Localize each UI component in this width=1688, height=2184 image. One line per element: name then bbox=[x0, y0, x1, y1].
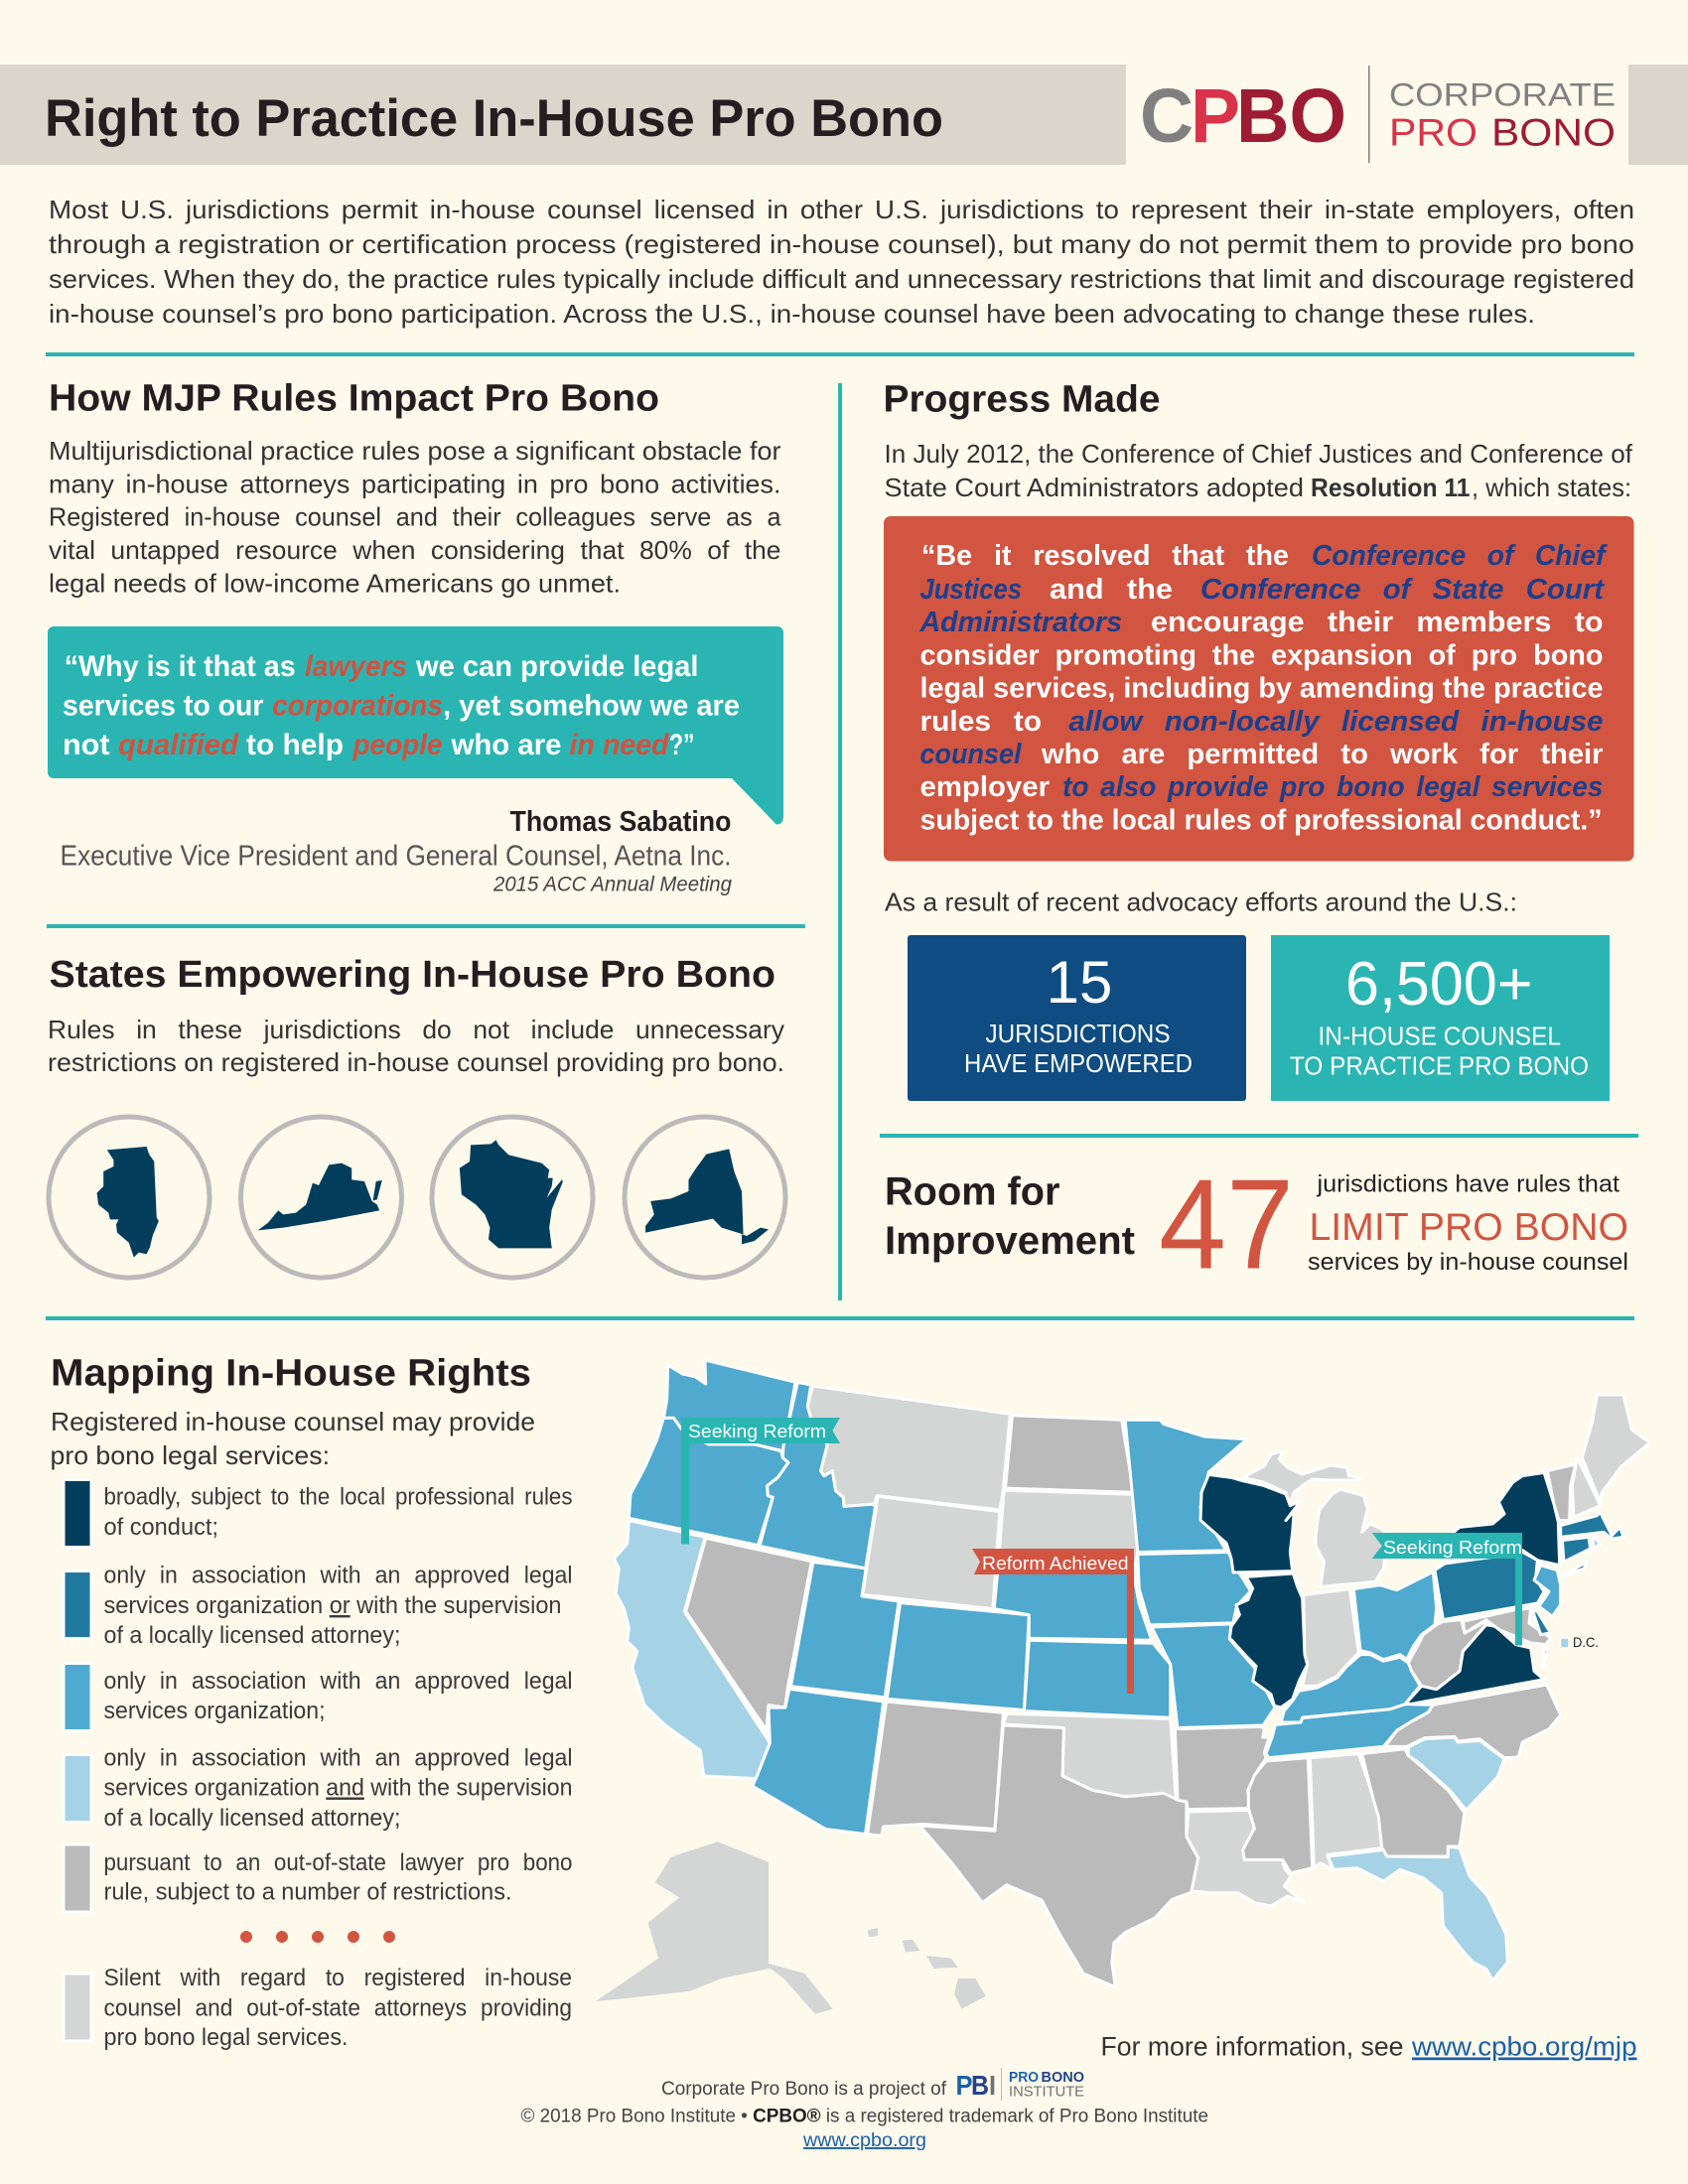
map region: great lakes and northeast states bbox=[1200, 1395, 1650, 1722]
stat: 47 jurisdictions limit pro bono: LIMIT PRO BONO bbox=[1309, 1206, 1628, 1249]
quote attribution: Thomas Sabatino bbox=[510, 806, 731, 838]
legend item: out-of-state rule bbox=[64, 1844, 572, 1912]
header band bbox=[0, 65, 1688, 165]
callout: Sabatino quote bubble: who are bbox=[451, 729, 562, 761]
state: Oklahoma bbox=[1003, 1713, 1176, 1801]
state: Washington bbox=[663, 1360, 795, 1451]
intro paragraph: services. When they do, the practice rules typically include difficult and unnecessary restrictions that limit and discourage registered bbox=[49, 264, 1634, 294]
panel: Resolution 11 quote: Justices bbox=[919, 574, 1022, 606]
stat card: 6,500+ in-house counsel: IN-HOUSE COUNSEL bbox=[1319, 1023, 1561, 1050]
intro paragraph: Most U.S. jurisdictions permit in-house counsel licensed in other U.S. jurisdictions to represent their in-state employers, often bbox=[49, 195, 1634, 224]
panel: Resolution 11 quote: to also provide pro bono legal services bbox=[1062, 771, 1603, 803]
logo: CPBO Corporate Pro Bono: P bbox=[1191, 73, 1240, 159]
intro paragraph: in-house counsel’s pro bono participation. Across the U.S., in-house counsel have been advocating to change these rules. bbox=[49, 299, 1535, 329]
state: Arkansas bbox=[1175, 1726, 1269, 1810]
legend item: silent: Silent with regard to registered in-house bbox=[103, 1965, 572, 1991]
state: Montana bbox=[807, 1386, 1010, 1510]
state: Mississippi bbox=[1243, 1758, 1313, 1873]
logo: CPBO Corporate Pro Bono bbox=[1140, 66, 1616, 163]
footer: www.cpbo.org bbox=[802, 2130, 926, 2151]
state: Iowa bbox=[1138, 1552, 1250, 1625]
panel: Resolution 11 quote: allow non-locally licensed in-house bbox=[1068, 706, 1603, 738]
state: Wyoming bbox=[863, 1496, 1000, 1609]
footer: Corporate Pro Bono is a project of bbox=[661, 2079, 947, 2100]
stat: 47 jurisdictions limit pro bono: jurisdictions have rules that bbox=[1316, 1171, 1619, 1197]
legend item: association: only in association with an approved legal bbox=[103, 1668, 572, 1695]
state: Rhode Island bbox=[1592, 1536, 1601, 1549]
callout: Sabatino quote bubble: to help bbox=[246, 729, 344, 761]
heading: Room for Improvement: Improvement bbox=[885, 1219, 1135, 1263]
callout: Sabatino quote bubble: services to our bbox=[63, 689, 264, 723]
callout: Sabatino quote bubble: “Why is it that as bbox=[65, 650, 296, 683]
stat: 47 jurisdictions limit pro bono bbox=[1159, 1154, 1628, 1297]
state: Colorado bbox=[887, 1602, 1029, 1710]
state: Ohio bbox=[1353, 1571, 1437, 1660]
logo: CPBO Corporate Pro Bono: BONO bbox=[1491, 111, 1616, 155]
state: Michigan upper bbox=[1243, 1451, 1360, 1504]
text: MJP rules paragraph: vital untapped resource when considering that 80% of the bbox=[49, 535, 780, 565]
stat: 47 jurisdictions limit pro bono: services by in-house counsel bbox=[1308, 1249, 1628, 1276]
legend item: silent: pro bono legal services. bbox=[103, 2024, 348, 2051]
legend item: association bbox=[64, 1664, 572, 1731]
stat: 47 jurisdictions limit pro bono: 47 bbox=[1159, 1154, 1294, 1297]
state: Alabama bbox=[1310, 1754, 1382, 1869]
logo: Pro Bono Institute bbox=[955, 2068, 1084, 2101]
map of the United States bbox=[596, 1360, 1650, 2014]
logo: Pro Bono Institute: B bbox=[971, 2070, 989, 2101]
state: Kansas bbox=[1024, 1640, 1171, 1717]
stat card: 15 jurisdictions: HAVE EMPOWERED bbox=[964, 1050, 1193, 1078]
state: Utah bbox=[790, 1563, 899, 1698]
state: Nebraska bbox=[994, 1564, 1152, 1640]
state: Arizona bbox=[753, 1689, 884, 1835]
state: Missouri bbox=[1152, 1624, 1275, 1728]
flag: Seeking Reform west: Seeking Reform bbox=[688, 1422, 826, 1441]
footer: © 2018 Pro Bono Institute • CPBO® is a registered trademark of Pro Bono Institute bbox=[520, 2107, 1208, 2126]
legend item: association and supervision bbox=[64, 1745, 572, 1832]
state: New York bbox=[1447, 1472, 1560, 1566]
legend item: broadly: of conduct; bbox=[103, 1514, 218, 1541]
text: legend intro: pro bono legal services: bbox=[50, 1440, 330, 1470]
text: legend intro bbox=[50, 1407, 535, 1470]
panel: Resolution 11 quote: “Be it resolved that the bbox=[921, 540, 1289, 572]
heading: How MJP Rules Impact Pro Bono: How MJP Rules Impact Pro Bono bbox=[49, 377, 659, 419]
legend item: silent bbox=[64, 1965, 572, 2051]
logo: Pro Bono Institute: I bbox=[989, 2070, 996, 2101]
stat card: 15 jurisdictions: 15 bbox=[1047, 949, 1112, 1016]
quote attribution: Executive Vice President and General Counsel, Aetna Inc. bbox=[60, 840, 731, 872]
logo: CPBO Corporate Pro Bono: BO bbox=[1236, 73, 1346, 159]
state: Oregon bbox=[629, 1418, 788, 1546]
text: advocacy results lead-in: As a result of recent advocacy efforts around the U.S.: bbox=[885, 887, 1517, 917]
state: South Dakota bbox=[998, 1490, 1138, 1573]
icon: Virginia bbox=[240, 1117, 401, 1278]
flag: Seeking Reform east: Seeking Reform bbox=[1383, 1538, 1522, 1558]
state: Massachusetts bbox=[1561, 1512, 1623, 1539]
legend divider dots bbox=[240, 1931, 395, 1943]
text: more information link: www.cpbo.org/mjp bbox=[1411, 2031, 1636, 2061]
map region: northwest states bbox=[614, 1360, 1010, 1779]
icon: Wisconsin bbox=[432, 1117, 593, 1278]
state: Pennsylvania bbox=[1435, 1552, 1544, 1620]
intro paragraph bbox=[49, 195, 1634, 329]
stat card: 15 jurisdictions: JURISDICTIONS bbox=[985, 1021, 1170, 1048]
state: New Mexico bbox=[868, 1702, 1003, 1836]
text: states paragraph: restrictions on registered in-house counsel providing pro bono. bbox=[48, 1047, 784, 1077]
state: Texas bbox=[919, 1725, 1198, 1987]
legend item: association and supervision: services organization and with the supervision bbox=[103, 1775, 572, 1801]
logo: Pro Bono Institute: PRO bbox=[1009, 2070, 1039, 2086]
panel: Resolution 11 quote: encourage their members to bbox=[1151, 607, 1603, 638]
state: Indiana bbox=[1303, 1589, 1358, 1686]
legend item: association or supervision bbox=[64, 1563, 572, 1649]
state: Kentucky bbox=[1281, 1655, 1420, 1722]
intro paragraph: through a registration or certification process (registered in-house counsel), but many do not permit them to provide pro bono bbox=[49, 229, 1634, 259]
logo: CPBO Corporate Pro Bono: CORPORATE bbox=[1389, 77, 1616, 113]
heading: States Empowering In-House Pro Bono: States Empowering In-House Pro Bono bbox=[50, 954, 775, 996]
panel: Resolution 11 quote: Conference of Chief bbox=[1312, 540, 1609, 572]
text: MJP rules paragraph bbox=[49, 436, 781, 598]
footer bbox=[520, 2068, 1208, 2151]
state: South Carolina bbox=[1408, 1737, 1504, 1810]
state: Connecticut bbox=[1562, 1537, 1591, 1562]
state: New Jersey bbox=[1534, 1566, 1561, 1616]
text: MJP rules paragraph: legal needs of low-income Americans go unmet. bbox=[49, 568, 621, 598]
title: Right to Practice In-House Pro Bono bbox=[45, 89, 943, 148]
panel: Resolution 11 quote: rules to bbox=[919, 706, 1042, 738]
logo: CPBO Corporate Pro Bono: C bbox=[1140, 73, 1194, 159]
heading: Room for Improvement bbox=[885, 1169, 1135, 1263]
callout: Sabatino quote bubble: lawyers bbox=[305, 650, 407, 683]
state: Delaware bbox=[1532, 1610, 1551, 1635]
icon: New York bbox=[625, 1117, 785, 1278]
callout: Sabatino quote bubble bbox=[48, 626, 783, 824]
text: more information link: For more information, see bbox=[1100, 2031, 1404, 2061]
heading: Mapping In-House Rights: Mapping In-House Rights bbox=[51, 1352, 531, 1394]
flag: Reform Achieved bbox=[972, 1549, 1134, 1694]
state: Maine bbox=[1582, 1395, 1650, 1502]
state: Alaska bbox=[596, 1842, 833, 2014]
text: MJP rules paragraph: Multijurisdictional practice rules pose a significant obstacle for bbox=[49, 436, 781, 466]
panel: Resolution 11 quote: legal services, including by amending the practice bbox=[919, 673, 1603, 705]
state: Long Island bbox=[1561, 1562, 1587, 1576]
map region: southeast states bbox=[1175, 1685, 1561, 1980]
map label: D.C.: D.C. bbox=[1573, 1634, 1599, 1650]
text: states paragraph: Rules in these jurisdictions do not include unnecessary bbox=[48, 1015, 784, 1044]
state icons row bbox=[49, 1117, 785, 1278]
panel: Resolution 11 quote: Conference of State Court bbox=[1200, 574, 1605, 606]
callout: Sabatino quote bubble: we can provide legal bbox=[415, 650, 699, 683]
text: states paragraph bbox=[48, 1015, 784, 1077]
stat card: 6,500+ in-house counsel: 6,500+ bbox=[1345, 950, 1533, 1019]
quote attribution bbox=[60, 806, 732, 895]
state: New Hampshire bbox=[1572, 1457, 1601, 1517]
panel: Resolution 11 quote bbox=[884, 516, 1634, 862]
legend item: broadly: broadly, subject to the local professional rules bbox=[103, 1483, 572, 1511]
flag: Reform Achieved: Reform Achieved bbox=[982, 1554, 1128, 1573]
panel: Resolution 11 quote: consider promoting the expansion of pro bono bbox=[919, 639, 1603, 671]
icon: Illinois bbox=[49, 1117, 210, 1278]
state: West Virginia bbox=[1408, 1620, 1496, 1690]
stat card: 15 jurisdictions bbox=[908, 935, 1246, 1101]
text: Resolution 11 intro: State Court Administrators adopted bbox=[884, 473, 1304, 502]
callout: Sabatino quote bubble: corporations bbox=[272, 689, 443, 723]
legend item: association or supervision: services organization or with the supervision bbox=[103, 1592, 562, 1619]
state: California bbox=[614, 1521, 770, 1779]
legend item: association and supervision: only in association with an approved legal bbox=[103, 1745, 572, 1771]
state: Tennessee bbox=[1266, 1705, 1433, 1758]
state: Nevada bbox=[686, 1538, 811, 1730]
quote attribution: 2015 ACC Annual Meeting bbox=[492, 874, 732, 895]
state: Idaho bbox=[760, 1382, 876, 1569]
state: North Dakota bbox=[1005, 1416, 1134, 1492]
legend bbox=[64, 1479, 572, 2051]
state: Virginia bbox=[1407, 1625, 1544, 1705]
panel: Resolution 11 quote: counsel bbox=[919, 739, 1022, 770]
callout: Sabatino quote bubble: qualified bbox=[118, 729, 239, 761]
logo: CPBO Corporate Pro Bono: PRO bbox=[1389, 111, 1477, 155]
legend item: association and supervision: of a locally licensed attorney; bbox=[103, 1805, 401, 1832]
state: Hawaii bbox=[868, 1928, 986, 2009]
heading: Room for Improvement: Room for bbox=[885, 1169, 1060, 1213]
state: Minnesota bbox=[1125, 1420, 1247, 1552]
panel: Resolution 11 quote: Administrators bbox=[919, 607, 1122, 638]
map label: D.C. bbox=[1561, 1634, 1599, 1650]
text: MJP rules paragraph: many in-house attorneys participating in pro bono activities. bbox=[49, 469, 780, 498]
panel: Resolution 11 quote: employer bbox=[919, 771, 1050, 803]
legend item: association or supervision: only in association with an approved legal bbox=[103, 1563, 572, 1588]
state: Wisconsin bbox=[1200, 1474, 1301, 1572]
legend item: association: services organization; bbox=[103, 1698, 326, 1724]
state: North Carolina bbox=[1385, 1685, 1561, 1758]
callout: Sabatino quote bubble: ?” bbox=[669, 729, 695, 761]
state: Florida bbox=[1328, 1846, 1507, 1980]
text: Resolution 11 intro bbox=[884, 439, 1633, 502]
state: Virginia eastern shore bbox=[1542, 1648, 1547, 1668]
stat card: 6,500+ in-house counsel bbox=[1271, 935, 1610, 1101]
flag: Seeking Reform east bbox=[1372, 1533, 1522, 1646]
stat card: 6,500+ in-house counsel: TO PRACTICE PRO BONO bbox=[1290, 1052, 1589, 1080]
panel: Resolution 11 quote: who are permitted to work for their bbox=[1041, 739, 1603, 770]
logo: Pro Bono Institute: INSTITUTE bbox=[1009, 2083, 1084, 2101]
text: more information link bbox=[1100, 2031, 1636, 2061]
text: Resolution 11 intro: In July 2012, the Conference of Chief Justices and Conference of bbox=[884, 439, 1633, 469]
panel: Resolution 11 quote: subject to the local rules of professional conduct.” bbox=[919, 804, 1603, 836]
logo: Pro Bono Institute: BONO bbox=[1041, 2070, 1084, 2086]
callout: Sabatino quote bubble: people bbox=[352, 729, 443, 761]
legend item: association or supervision: of a locally licensed attorney; bbox=[103, 1622, 401, 1649]
legend item: out-of-state rule: rule, subject to a number of restrictions. bbox=[103, 1878, 512, 1906]
logo: Pro Bono Institute: P bbox=[955, 2070, 973, 2101]
text: Resolution 11 intro: , which states: bbox=[1472, 473, 1631, 502]
flag: Seeking Reform west bbox=[681, 1418, 840, 1545]
callout: Sabatino quote bubble: , yet somehow we are bbox=[443, 689, 740, 723]
legend item: out-of-state rule: pursuant to an out-of-state lawyer pro bono bbox=[103, 1849, 572, 1876]
state: Vermont bbox=[1547, 1464, 1576, 1521]
state: Michigan lower bbox=[1316, 1489, 1387, 1586]
state: Illinois bbox=[1229, 1573, 1308, 1707]
text: MJP rules paragraph: Registered in-house counsel and their colleagues serve as a bbox=[49, 502, 781, 532]
map region: central and southwest states bbox=[596, 1416, 1275, 2014]
text: legend intro: Registered in-house counsel may provide bbox=[51, 1407, 535, 1436]
state: Maryland bbox=[1463, 1608, 1551, 1645]
callout: Sabatino quote bubble: in need bbox=[570, 729, 669, 761]
text: Resolution 11 intro: Resolution 11 bbox=[1311, 473, 1470, 502]
state: Georgia bbox=[1362, 1749, 1465, 1856]
callout: Sabatino quote bubble: not bbox=[63, 729, 110, 761]
legend item: broadly bbox=[64, 1479, 572, 1547]
heading: Progress Made: Progress Made bbox=[884, 379, 1160, 421]
legend item: silent: counsel and out-of-state attorneys providing bbox=[103, 1995, 572, 2021]
state: Louisiana bbox=[1187, 1810, 1304, 1906]
panel: Resolution 11 quote: and the bbox=[1050, 574, 1173, 606]
